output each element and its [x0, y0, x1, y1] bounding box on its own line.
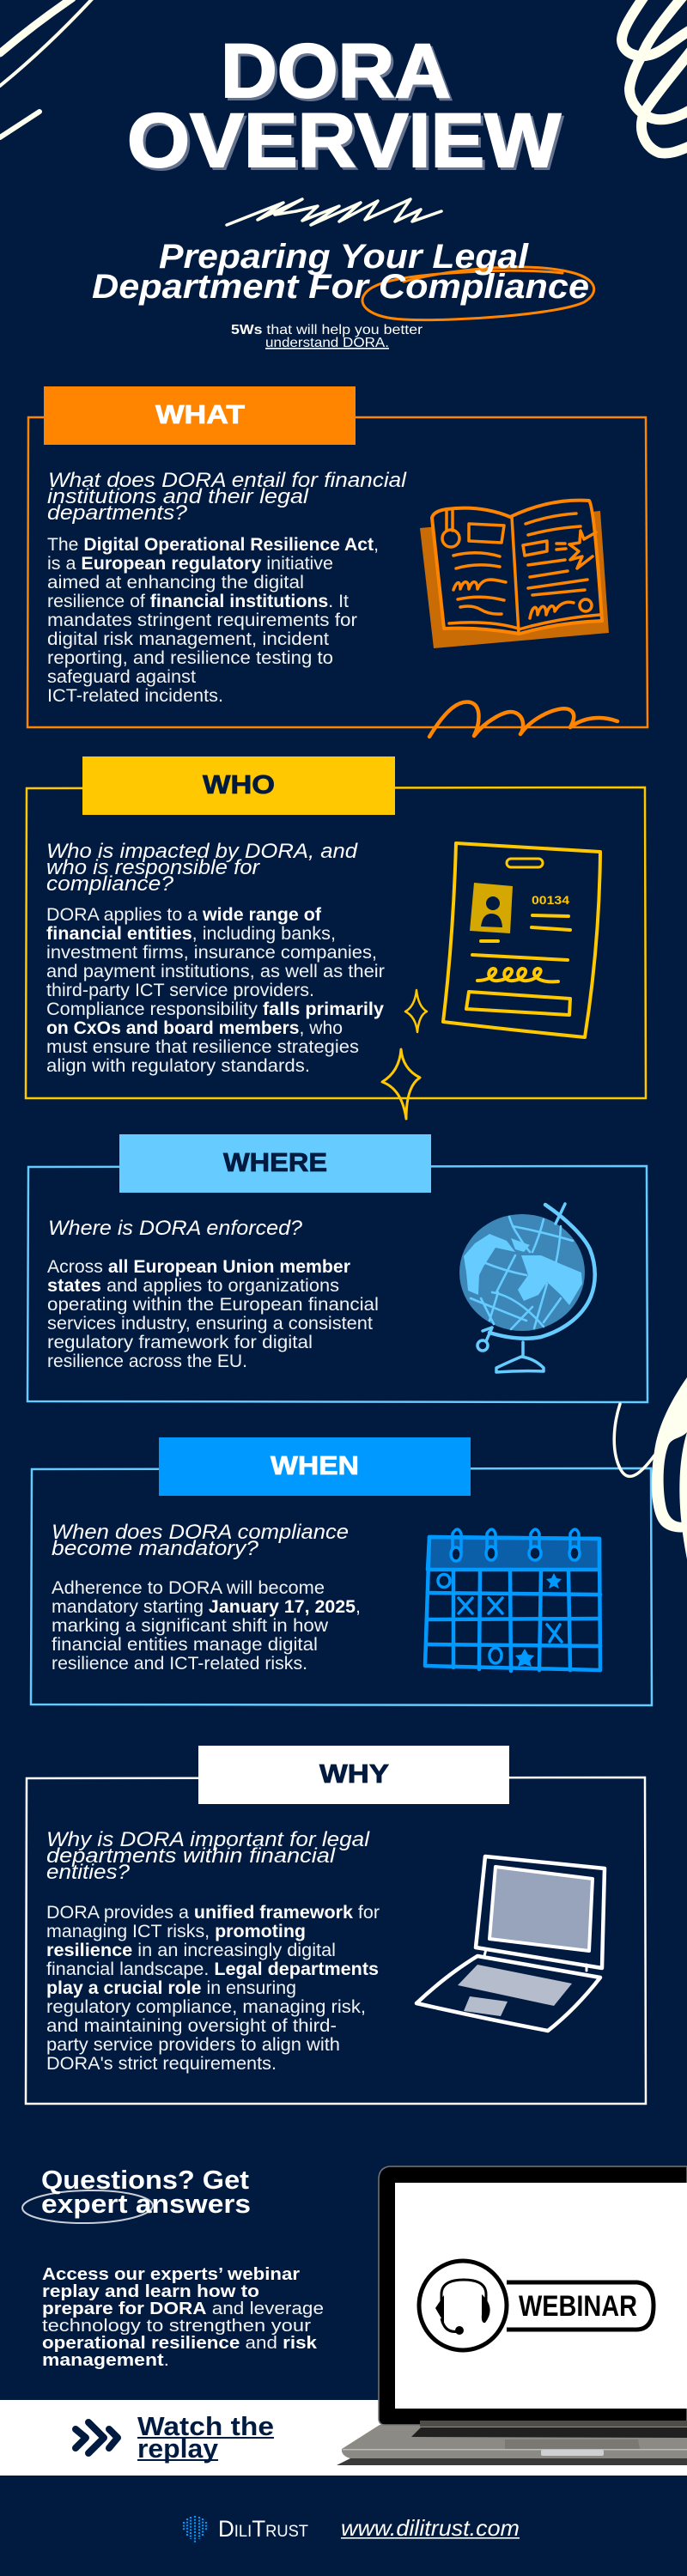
- question: why: entities?: [46, 1861, 131, 1884]
- question: who: compliance?: [46, 872, 174, 896]
- subtitle: [92, 238, 594, 320]
- website link: www.dilitrust.com: [341, 2515, 520, 2541]
- webinar badge: [419, 2261, 654, 2350]
- body text: why: financial landscape. Legal departments: [46, 1959, 379, 1979]
- laptop photo: [337, 2166, 687, 2465]
- body text: where: Across all European Union member: [47, 1257, 350, 1277]
- banner: why: [198, 1746, 509, 1804]
- question: what: institutions and their legal: [47, 485, 309, 508]
- body text: where: resilience across the EU.: [47, 1352, 247, 1371]
- banner: when: [159, 1437, 471, 1496]
- logo: dilitrust: [184, 2516, 308, 2543]
- intro text: [231, 323, 423, 350]
- panel: when: [31, 1377, 687, 1705]
- banner: what: [44, 386, 356, 445]
- body text: where: services industry, ensuring a consistent: [47, 1314, 373, 1334]
- body text: who: and payment institutions, as well as their: [46, 962, 385, 981]
- body text: why: resilience in an increasingly digital: [46, 1941, 336, 1960]
- body text: why: play a crucial role in ensuring: [46, 1978, 296, 1998]
- icon: globe: [459, 1204, 595, 1372]
- icon: small sparkle: [405, 990, 427, 1032]
- scribble: top right: [622, 0, 687, 154]
- cta body text: Access our experts’ webinar: [42, 2265, 300, 2284]
- icon: large sparkle: [382, 1049, 420, 1119]
- panel: where: [27, 1134, 647, 1402]
- body text: where: operating within the European financial: [47, 1295, 379, 1315]
- cta body text: operational resilience and risk: [42, 2334, 318, 2353]
- body text: what: mandates stringent requirements for: [47, 611, 357, 630]
- question: when: When does DORA compliance: [52, 1521, 349, 1544]
- cta link: watch the replay: [137, 2411, 274, 2464]
- cta: white band: [0, 2400, 687, 2476]
- cta body text: prepare for DORA and leverage: [42, 2300, 324, 2318]
- body text: what: digital risk management, incident: [47, 629, 329, 649]
- question: what: departments?: [47, 501, 188, 525]
- body text: what: reporting, and resilience testing to: [47, 648, 333, 668]
- cta link: watch the replay: replay: [137, 2433, 219, 2464]
- icon: chevrons: [76, 2422, 118, 2453]
- body text: where: states and applies to organizations: [47, 1276, 339, 1296]
- question: who: who is responsible for: [46, 856, 260, 879]
- body text: who: on CxOs and board members, who: [46, 1018, 343, 1038]
- banner: where: WHERE: [223, 1147, 327, 1177]
- body text: who: third-party ICT service providers.: [46, 981, 314, 1000]
- body text: what: [47, 535, 379, 706]
- icon: open book: [420, 501, 609, 648]
- body text: why: regulatory compliance, managing risk,: [46, 1997, 366, 2017]
- panel: who: [26, 756, 646, 1119]
- body text: what: resilience of financial institutions. It: [47, 592, 349, 611]
- body text: why: managing ICT risks, promoting: [46, 1922, 306, 1941]
- question: what: What does DORA entail for financial: [48, 469, 407, 492]
- body text: who: financial entities, including banks,: [46, 924, 336, 944]
- cta heading: [22, 2165, 251, 2224]
- subtitle: Preparing Your Legal: [159, 238, 529, 276]
- body text: what: ICT-related incidents.: [47, 686, 223, 706]
- scribble: right middle: [614, 1377, 687, 1559]
- webinar badge: WEBINAR: [519, 2290, 637, 2323]
- body text: who: [46, 905, 385, 1076]
- cta link: watch the replay: Watch the: [137, 2411, 274, 2441]
- question: who: [46, 840, 358, 896]
- question: why: departments within financial: [46, 1844, 336, 1868]
- question: where: Where is DORA enforced?: [48, 1217, 303, 1240]
- cta body text: replay and learn how to: [42, 2282, 259, 2301]
- banner: who: [82, 756, 395, 815]
- question: who: Who is impacted by DORA, and: [46, 840, 358, 863]
- body text: when: mandatory starting January 17, 2025,: [52, 1597, 361, 1617]
- question: why: Why is DORA important for legal: [46, 1828, 370, 1851]
- title: [127, 27, 561, 183]
- body text: when: [52, 1578, 361, 1674]
- cta heading: expert answers: [41, 2189, 251, 2219]
- banner: when: WHEN: [271, 1450, 359, 1480]
- body text: who: DORA applies to a wide range of: [46, 905, 322, 925]
- scribble: what panel: [429, 702, 617, 737]
- body text: who: investment firms, insurance companies,: [46, 943, 377, 963]
- question: why: [46, 1828, 370, 1884]
- body text: what: The Digital Operational Resilience Act,: [47, 535, 379, 555]
- body text: why: and maintaining oversight of third-: [46, 2016, 337, 2036]
- body text: when: financial entities manage digital: [52, 1635, 318, 1655]
- body text: when: resilience and ICT-related risks.: [52, 1654, 307, 1674]
- body text: who: align with regulatory standards.: [46, 1056, 310, 1076]
- logo: dilitrust: DiliTrust: [218, 2516, 308, 2542]
- banner: what: WHAT: [155, 399, 245, 429]
- icon: laptop: [416, 1856, 605, 2031]
- body text: what: is a European regulatory initiative: [47, 554, 333, 574]
- body text: where: regulatory framework for digital: [47, 1333, 313, 1352]
- body text: why: DORA's strict requirements.: [46, 2054, 277, 2074]
- intro text: understand DORA.: [265, 336, 389, 350]
- body text: what: aimed at enhancing the digital: [47, 573, 304, 592]
- title: DORA: [221, 27, 451, 113]
- body text: when: Adherence to DORA will become: [52, 1578, 325, 1598]
- banner: who: WHO: [203, 769, 275, 799]
- question: when: [52, 1521, 349, 1560]
- scribble under title: [227, 199, 441, 225]
- panel: why: [26, 1746, 646, 2104]
- banner: why: WHY: [319, 1759, 389, 1789]
- panel: what: [27, 386, 647, 737]
- title: OVERVIEW: [127, 97, 561, 183]
- cta body text: [42, 2265, 324, 2370]
- icon: logo mark: [184, 2516, 206, 2543]
- icon: id badge: [443, 843, 600, 1037]
- cta heading: Questions? Get: [41, 2165, 249, 2195]
- body text: where: [47, 1257, 379, 1371]
- body text: why: party service providers to align with: [46, 2035, 340, 2055]
- body text: when: marking a significant shift in how: [52, 1616, 329, 1636]
- question: when: become mandatory?: [52, 1537, 259, 1560]
- body text: why: [46, 1903, 380, 2074]
- subtitle: Department For Compliance: [92, 268, 589, 306]
- icon: calendar: [425, 1529, 600, 1671]
- cta body text: technology to strengthen your: [42, 2317, 311, 2336]
- intro text: 5Ws that will help you better: [231, 323, 423, 337]
- question: what: [47, 469, 407, 525]
- banner: where: [119, 1134, 431, 1193]
- icon: id badge: 00134: [532, 893, 569, 907]
- body text: why: DORA provides a unified framework for: [46, 1903, 380, 1923]
- body text: what: safeguard against: [47, 667, 196, 687]
- body text: who: Compliance responsibility falls primarily: [46, 999, 384, 1019]
- highlight ellipse: [22, 2190, 153, 2224]
- scribble: top left: [0, 0, 93, 137]
- highlight ellipse: [362, 267, 594, 320]
- cta body text: management .: [42, 2351, 169, 2370]
- body text: who: must ensure that resilience strategies: [46, 1037, 359, 1057]
